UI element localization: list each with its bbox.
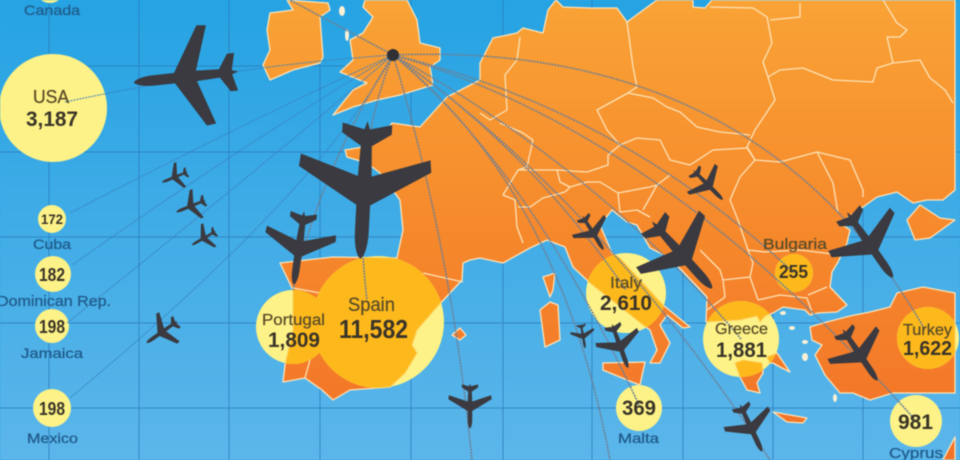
disc: Greece [703,301,779,377]
plane: Spain [294,118,434,262]
label: Turkey: Turkey [903,322,952,339]
UK hub marker [387,49,399,61]
land seen through the discs [284,254,956,388]
figure: Jamaica: 198 [39,317,65,337]
figure: Bulgaria: 255 [779,262,808,282]
plane: Balkans [679,156,737,214]
figure: Mexico: 198 [39,399,65,419]
figure: Cuba: 172 [41,212,63,227]
plane: Mexico [136,306,188,358]
plane: Greece [717,394,785,460]
label: Bulgaria: Bulgaria [763,236,828,253]
figure: Italy: 2,610 [600,292,652,315]
disc: Canada [35,0,65,3]
map of Europe [263,0,955,460]
label: Greece: Greece [715,321,768,338]
disc: Jamaica [35,309,69,343]
disc: Dominican Rep. [35,256,71,292]
plane: Sicily route small [569,322,597,350]
plane: Jamaica [185,219,223,257]
figure: Spain: 11,582 [339,314,408,344]
figure: Dominican Rep.: 182 [39,265,65,285]
label: Portugal: Portugal [262,312,325,329]
plane: Portugal [259,206,339,290]
disc: Mexico [33,389,71,427]
plane: Turkey [818,313,902,397]
label: Italy: Italy [610,275,642,292]
plane: USA [129,21,243,133]
disc: Italy [586,253,666,333]
disc: Spain [312,256,444,388]
label: Cuba: Cuba [33,237,72,252]
label: Jamaica: Jamaica [21,345,83,361]
figure: Cyprus: 981 [898,411,933,434]
plane: Adriatic small [566,206,620,260]
plane: Canary route [448,384,492,428]
plane: Italy [620,193,744,317]
figure: Malta: 369 [622,397,656,420]
figure: USA: 3,187 [26,108,78,131]
label: Spain: Spain [348,295,395,316]
figure: Portugal: 1,809 [268,329,320,352]
label: Mexico: Mexico [27,430,78,446]
plane silhouettes [129,21,924,460]
plane: Dominican Rep. [170,186,212,226]
disc: Bulgaria [775,254,813,292]
disc: Portugal [256,290,330,364]
country borders [293,0,953,378]
disc: Malta [616,385,662,431]
disc: USA [0,54,107,162]
disc: Cuba [38,205,66,233]
plane: Cuba [157,159,193,195]
Aegean islands [339,6,837,402]
plane: Bulgaria route [816,190,924,300]
label: Malta: Malta [618,430,659,446]
plane: Malta [591,316,649,376]
figure: Turkey: 1,622 [903,338,952,360]
label: Canada: Canada [24,2,80,18]
figure: Greece: 1,881 [716,339,767,362]
label: Dominican Rep.: Dominican Rep. [0,294,111,310]
disc: Cyprus [890,395,942,447]
label: USA: USA [33,87,69,107]
disc: Turkey [897,307,959,369]
